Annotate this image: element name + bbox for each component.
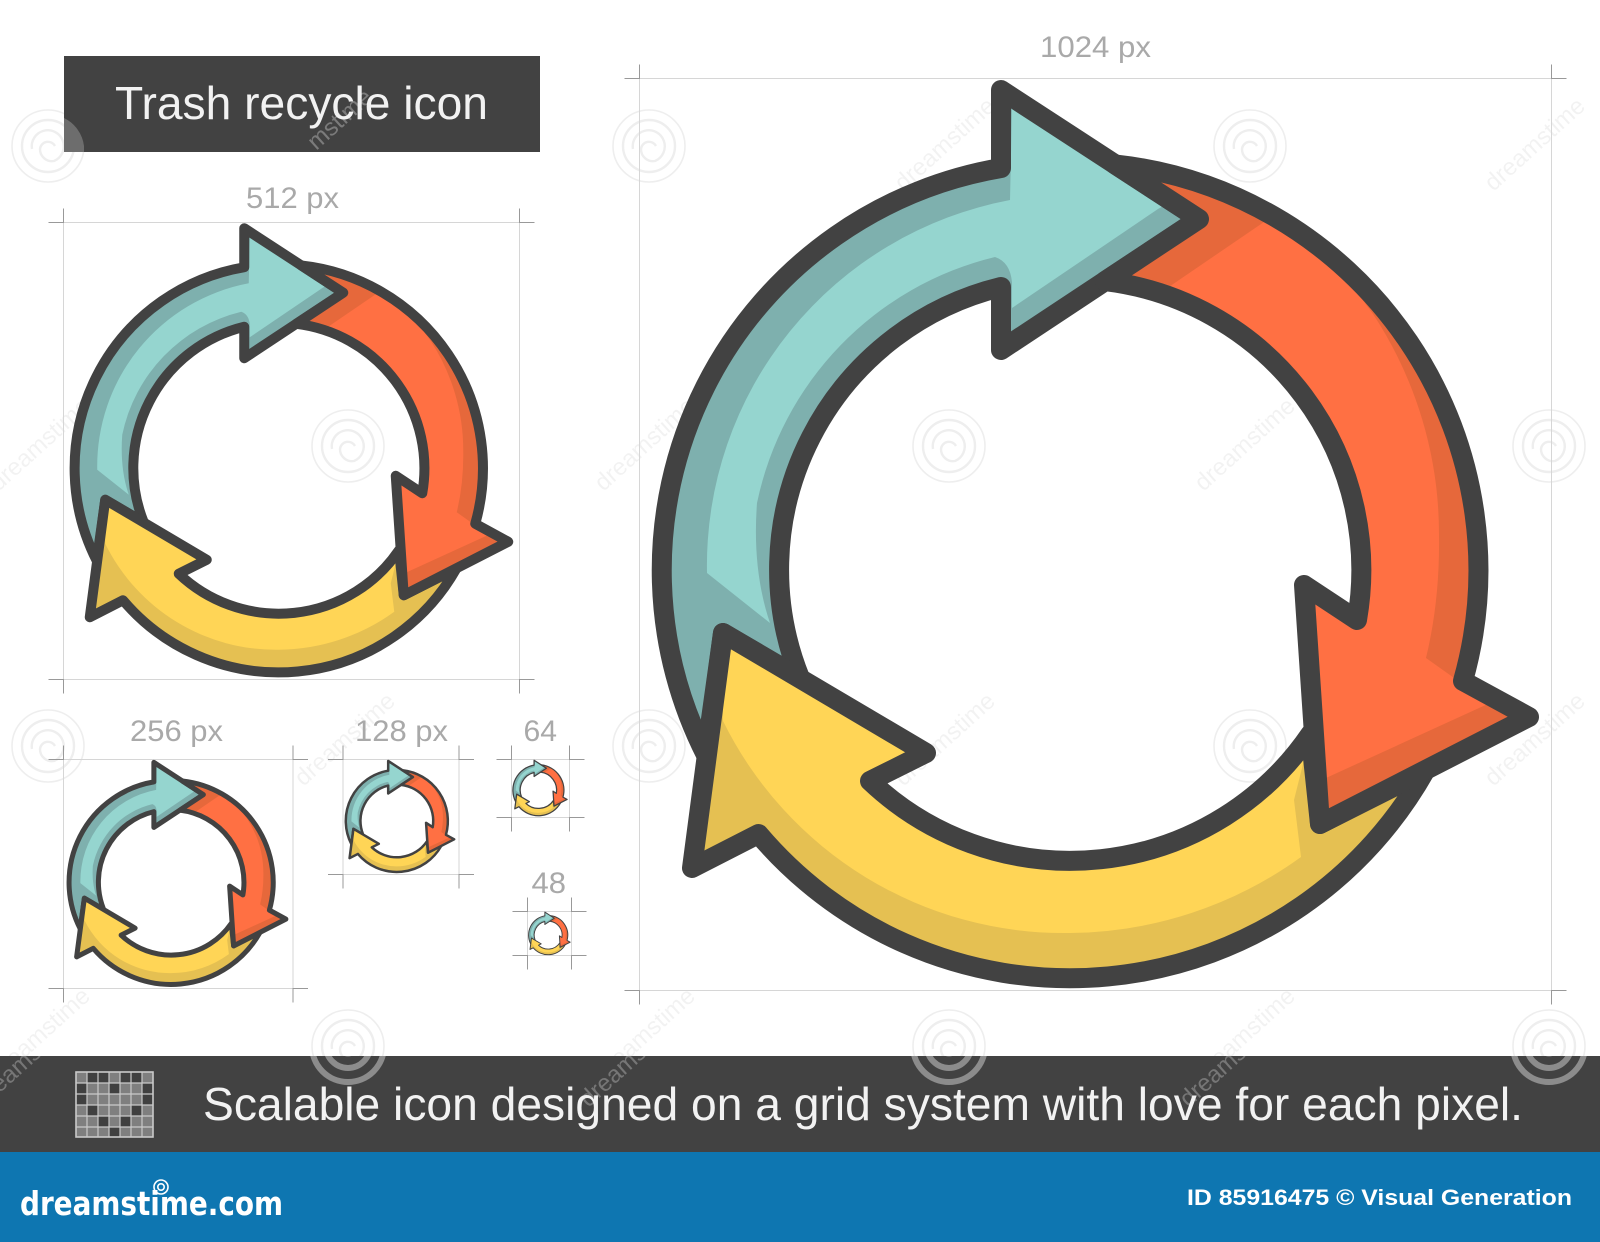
512 px preview <box>48 182 534 694</box>
title banner <box>64 56 540 155</box>
48 px preview <box>512 867 586 970</box>
icon: recycle arrows, 48 px <box>529 912 570 955</box>
frame: 128 px <box>328 746 474 888</box>
128 px preview <box>328 715 474 888</box>
footer bar <box>0 1152 1600 1242</box>
256 px preview <box>48 715 308 1002</box>
64 px preview <box>496 715 584 832</box>
title banner: mstime <box>302 84 378 155</box>
logo text: dreamstime.com <box>20 1184 283 1223</box>
tagline text: Scalable icon designed on a grid system with love for each pixel. <box>203 1078 1523 1130</box>
title banner: Trash recycle icon <box>115 77 488 129</box>
watermark text <box>0 92 1591 1086</box>
tagline bar: dreamstime <box>1174 1008 1286 1112</box>
tagline bar <box>0 1008 1600 1152</box>
icon: recycle arrows, 64 px <box>513 760 567 816</box>
watermark spirals <box>12 110 1585 1082</box>
size label: 64: 64 <box>524 715 557 748</box>
icon: recycle arrows, 512 px <box>75 228 508 672</box>
size label: 1024 px: 1024 px <box>1040 31 1151 64</box>
watermark text: dreamstime <box>1189 982 1301 1086</box>
size label: 48: 48 <box>532 867 566 900</box>
frame: 48 px <box>512 898 586 970</box>
icon: recycle arrows, 128 px <box>346 761 454 872</box>
frame: 64 px <box>496 746 584 832</box>
watermark text: dreamstime <box>589 982 701 1086</box>
frame: 512 px <box>48 208 534 694</box>
icon: recycle arrows, 256 px <box>69 762 286 984</box>
frame: 256 px <box>48 746 308 1002</box>
frame: 1024 px <box>624 64 1566 1004</box>
size label: 128 px: 128 px <box>355 715 448 748</box>
watermark text: dreamstime <box>889 687 1001 791</box>
icon: logo spiral <box>154 1180 168 1194</box>
size label: 256 px: 256 px <box>130 715 223 748</box>
image credit: ID 85916475 © Visual Generation <box>1187 1185 1572 1210</box>
watermark text: dreamstime <box>289 687 401 791</box>
icon: recycle arrows, 1024 px <box>662 90 1529 978</box>
watermark text: dreamstime <box>1479 687 1591 791</box>
icon: pixel grid <box>76 1072 153 1137</box>
watermark text: dreamstime <box>589 392 701 496</box>
watermark text: dreamstime <box>1479 92 1591 196</box>
size label: 512 px: 512 px <box>246 182 339 215</box>
watermark text: dreamstime <box>889 92 1001 196</box>
watermark text: dreamstime <box>1189 392 1301 496</box>
tagline bar: dreamstime <box>574 1008 686 1112</box>
